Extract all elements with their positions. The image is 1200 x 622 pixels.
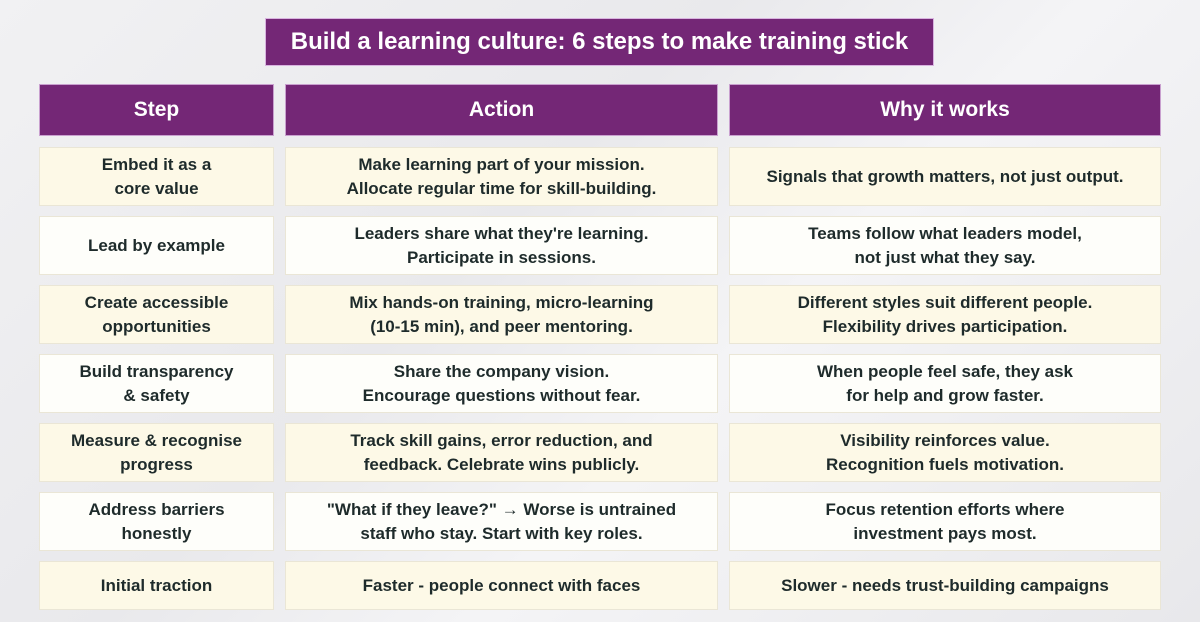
row 6 action: "What if they leave?" → Worse is untrained bbox=[327, 500, 676, 518]
title bbox=[265, 18, 934, 66]
row 7 action bbox=[285, 561, 718, 610]
row 4 action bbox=[285, 354, 718, 413]
row 4 why: for help and grow faster. bbox=[846, 386, 1044, 404]
header: Why it works bbox=[729, 84, 1161, 136]
row 6 step: Address barriers bbox=[88, 500, 225, 518]
row 5 why: Visibility reinforces value. bbox=[840, 430, 1050, 450]
row 2 action: Leaders share what they're learning. bbox=[354, 224, 649, 242]
row 2 why bbox=[729, 216, 1161, 275]
row 6 action bbox=[285, 492, 718, 551]
row 2 why: Teams follow what leaders model, bbox=[808, 224, 1082, 242]
row 1 action: Allocate regular time for skill-building. bbox=[347, 178, 656, 198]
row 5 action: feedback. Celebrate wins publicly. bbox=[364, 454, 639, 474]
row 4 why: When people feel safe, they ask bbox=[817, 362, 1073, 380]
row 6 why: Focus retention efforts where bbox=[826, 500, 1064, 518]
row 7 why: Slower - needs trust-building campaigns bbox=[781, 576, 1109, 594]
header: Action bbox=[285, 84, 718, 136]
row 4 why bbox=[729, 354, 1161, 413]
row 3 why bbox=[729, 285, 1161, 344]
row 1 step bbox=[39, 147, 274, 206]
row 5 step bbox=[39, 423, 274, 482]
row 3 step: Create accessible bbox=[85, 292, 228, 312]
row 6 step bbox=[39, 492, 274, 551]
row 1 action: Make learning part of your mission. bbox=[358, 154, 645, 174]
row 6 step: honestly bbox=[122, 524, 191, 542]
row 6 why bbox=[729, 492, 1161, 551]
row 1 why: Signals that growth matters, not just output. bbox=[766, 166, 1124, 186]
row 5 why bbox=[729, 423, 1161, 482]
row 5 action: Track skill gains, error reduction, and bbox=[350, 430, 653, 450]
row 6 why: investment pays most. bbox=[853, 524, 1037, 542]
header: Step: Step bbox=[134, 98, 179, 121]
row 3 action bbox=[285, 285, 718, 344]
row 3 why: Flexibility drives participation. bbox=[823, 316, 1067, 336]
row 6 action: staff who stay. Start with key roles. bbox=[360, 524, 643, 542]
row 3 action: Mix hands-on training, micro-learning bbox=[349, 292, 654, 312]
row 4 action: Encourage questions without fear. bbox=[363, 386, 640, 404]
row 4 action: Share the company vision. bbox=[394, 362, 609, 380]
row 2 action: Participate in sessions. bbox=[407, 248, 596, 266]
row 3 action: (10-15 min), and peer mentoring. bbox=[370, 316, 633, 336]
row 3 why: Different styles suit different people. bbox=[798, 292, 1092, 312]
row 7 action: Faster - people connect with faces bbox=[363, 576, 640, 594]
row 4 step: Build transparency bbox=[80, 362, 234, 380]
header: Step bbox=[39, 84, 274, 136]
row 7 why bbox=[729, 561, 1161, 610]
title: Build a learning culture: 6 steps to make training stick bbox=[291, 28, 908, 55]
row 1 why bbox=[729, 147, 1161, 206]
row 1 step: core value bbox=[114, 178, 199, 198]
row 1 step: Embed it as a bbox=[102, 154, 211, 174]
row 2 step bbox=[39, 216, 274, 275]
row 2 why: not just what they say. bbox=[854, 248, 1036, 266]
row 4 step: & safety bbox=[123, 386, 190, 404]
row 7 step bbox=[39, 561, 274, 610]
row 2 step: Lead by example bbox=[88, 236, 225, 254]
row 7 step: Initial traction bbox=[101, 576, 212, 594]
row 3 step bbox=[39, 285, 274, 344]
row 3 step: opportunities bbox=[102, 316, 211, 336]
header: Why it works: Why it works bbox=[880, 98, 1010, 121]
row 5 why: Recognition fuels motivation. bbox=[826, 454, 1064, 474]
row 5 step: Measure & recognise bbox=[71, 430, 242, 450]
row 5 step: progress bbox=[120, 454, 193, 474]
row 1 action bbox=[285, 147, 718, 206]
header: Action: Action bbox=[469, 98, 534, 121]
row 5 action bbox=[285, 423, 718, 482]
row 2 action bbox=[285, 216, 718, 275]
row 4 step bbox=[39, 354, 274, 413]
